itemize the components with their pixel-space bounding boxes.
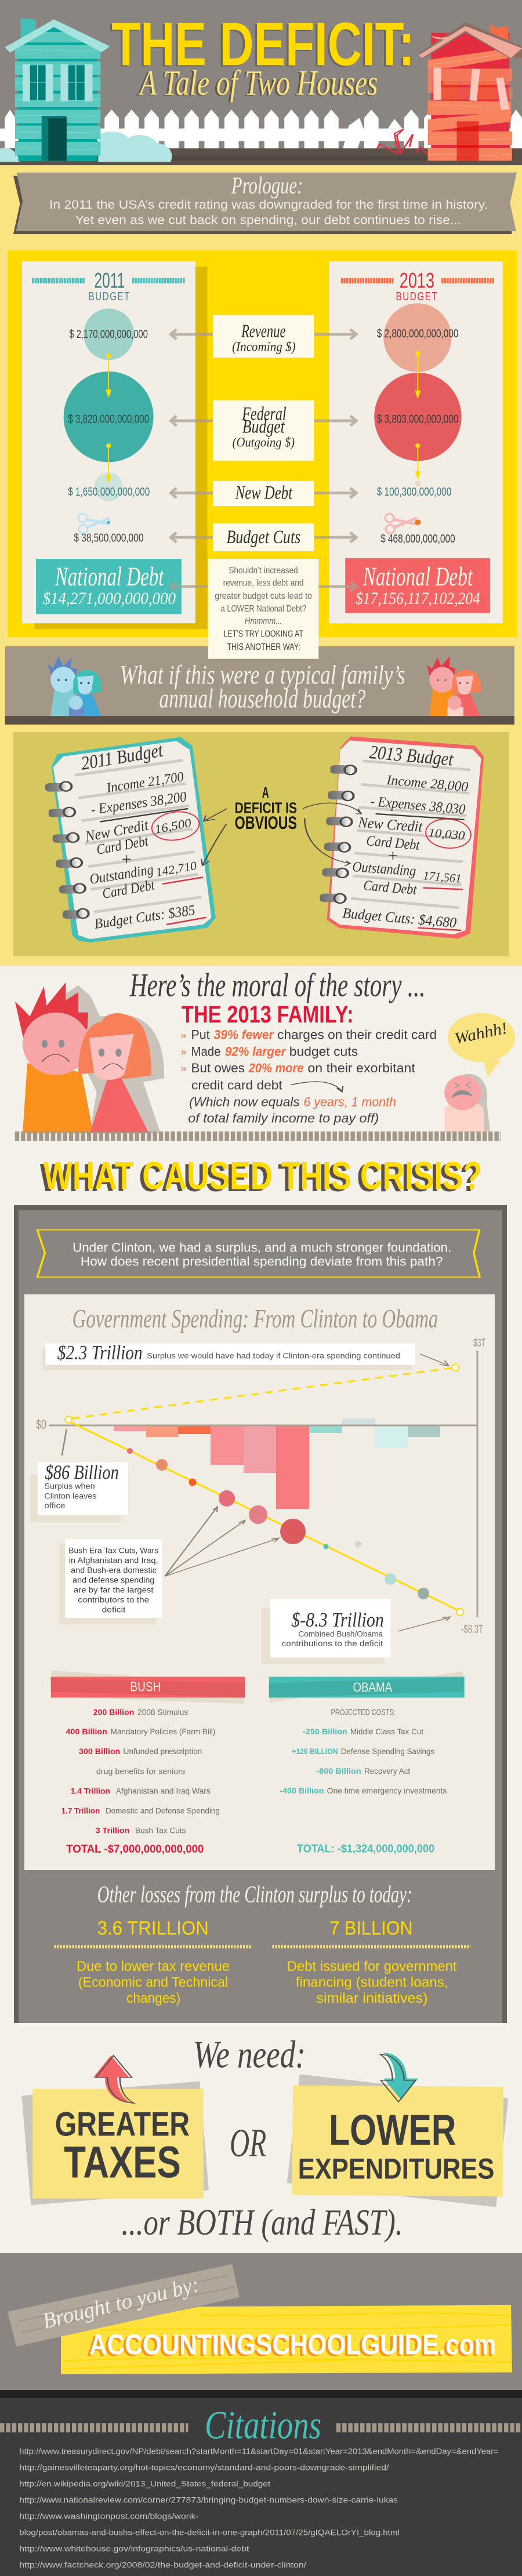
list: bush spending: Bush Tax Cuts (135, 1827, 186, 1835)
list: bush spending: 400 Billion (66, 1727, 107, 1737)
label: new debt: New Debt (235, 482, 293, 503)
arrow: down (380, 2053, 418, 2102)
page background: sponsor band (0, 2253, 522, 2390)
speech bubble (448, 1013, 515, 1077)
notebook: 2013 budget (320, 737, 483, 938)
notebook: 2013 budget: 2013 Budget (368, 742, 455, 770)
notebook: 2011 budget: 142,710 (155, 858, 198, 879)
callout: $86 billion (30, 1429, 128, 1522)
note: greater taxes: TAXES (64, 2137, 181, 2187)
note: greater taxes (21, 2082, 209, 2205)
notebook: 2013 budget: 10,030 (428, 825, 466, 843)
callout: question box: a LOWER National Debt? (221, 603, 306, 614)
callout: bush era contributors: are by far the largest (74, 1586, 154, 1595)
notebook: 2011 budget: Outstanding (89, 862, 155, 887)
stat: 3.6 trillion: 3.6 TRILLION (97, 1918, 209, 1939)
banner text: What if this were a typical family’s (120, 660, 405, 690)
chart axes (36, 1337, 485, 1636)
arrows: connecting labels to panels (171, 329, 356, 591)
icon: scissors 2013 (385, 514, 421, 533)
list: obama spending: Defense Spending Savings (341, 1747, 434, 1756)
list: obama spending: -800 Billion (316, 1767, 361, 1776)
label: federal budget: Federal (242, 403, 287, 424)
list: family facts: » (181, 1063, 186, 1074)
chart axes: $3T (473, 1337, 485, 1349)
callout: -$8.3 trillion: Combined Bush/Obama (298, 1629, 383, 1639)
2011 heading: BUDGET (89, 290, 130, 303)
bubble: revenue 2013: $ 2,800,000,000,000 (377, 328, 458, 340)
panel: 2011 budget (22, 261, 195, 623)
list: family facts: » (181, 1046, 186, 1057)
notebook: 2011 budget: Card Debt (95, 834, 150, 858)
2013 heading (341, 269, 494, 303)
callout: -$8.3 trillion: contributions to the deficit (282, 1639, 383, 1649)
callout: $2.3 trillion: $2.3 Trillion (57, 1341, 143, 1364)
list: obama spending: -250 Billion (303, 1727, 347, 1737)
panel shadow (34, 267, 208, 629)
header section (0, 10, 522, 234)
bush header (51, 1671, 245, 1704)
callout: a deficit is obvious: OBVIOUS (235, 813, 297, 833)
list: family facts: Made (191, 1044, 221, 1058)
list: bush spending: Domestic and Defense Spending (106, 1807, 220, 1815)
section: we need (21, 2033, 508, 2243)
callout: bush era contributors: and defense spending (72, 1576, 154, 1585)
national debt 2011 (36, 559, 182, 614)
label: federal budget (213, 400, 314, 461)
callout: question box: Hmmmm... (245, 616, 282, 626)
notebook: 2011 budget: - Expenses 38,200 (90, 789, 188, 818)
stat: 7 billion (273, 1918, 470, 2006)
other losses section (55, 1881, 470, 2006)
callout: bush era contributors: contributors to the (78, 1596, 149, 1604)
stat: 3.6 trillion (55, 1918, 252, 2006)
callout: -$8.3 trillion (262, 1599, 450, 1664)
list: bush spending: Mandatory Policies (Farm Bill) (111, 1727, 215, 1737)
label: budget cuts (213, 523, 314, 551)
label: revenue (213, 315, 314, 358)
list: obama spending (280, 1708, 447, 1855)
callout: $86 billion: $86 Billion (45, 1461, 119, 1483)
list: bush spending: 3 Trillion (96, 1827, 129, 1835)
stat: 7 billion: similar initiatives) (316, 1991, 428, 2006)
page background: citations band (0, 2390, 522, 2576)
2011 heading (32, 269, 185, 303)
bush header: BUSH (130, 1679, 161, 1694)
label: federal budget: Budget (242, 416, 285, 437)
notebook: 2013 budget: Outstanding (352, 859, 416, 879)
callout: a deficit is obvious: DEFICIT IS (235, 799, 297, 816)
section: the moral of the story (15, 967, 515, 1200)
bubble: spending 2013: $ 3,803,000,000,000 (377, 413, 458, 425)
list: bush spending: drug benefits for seniors (96, 1767, 185, 1776)
citations list: http://www.factcheck.org/2008/02/the-budget-and-deficit-under-clinton/ (19, 2560, 306, 2570)
label: revenue: (Incoming $) (232, 339, 296, 354)
panel: prologue banner: Prologue: (231, 172, 303, 199)
citations list: http://www.whitehouse.gov/infographics/us-national-debt (19, 2544, 249, 2553)
chart dots (127, 1448, 429, 1599)
icon: healthy teal house (5, 19, 110, 161)
citations heading: Citations (205, 2403, 321, 2447)
bubble: new debt 2011: $ 1,650,000,000,000 (68, 486, 150, 499)
label: revenue: Revenue (241, 321, 285, 341)
panel: household budget notebooks (13, 732, 509, 956)
wood plank: brought to you by: Brought to you by: (40, 2272, 201, 2334)
list: obama spending: +126 BILLION (292, 1747, 338, 1756)
citations list (19, 2447, 499, 2570)
chart axes: $0 (36, 1417, 46, 1432)
callout: $86 billion: Surplus when (44, 1482, 95, 1491)
notebook: 2011 budget: + (121, 850, 132, 869)
list: family facts: Put (191, 1028, 210, 1042)
callout: bush era contributors: in Afghanistan and Iraq, (69, 1556, 158, 1565)
callout: bush era contributors: Bush Era Tax Cuts, Wars (68, 1546, 158, 1555)
panel: government spending chart (24, 1294, 495, 1870)
bubble: new debt 2011 (68, 472, 150, 501)
national debt 2013 (345, 558, 490, 613)
line: actual deficit (65, 1416, 463, 1616)
bubble: spending 2011: $ 3,820,000,000,000 (68, 413, 149, 425)
notebook: 2013 budget: + (387, 846, 398, 865)
list: family facts: budget cuts (289, 1044, 358, 1058)
callout: bush era contributors: and Bush-era domestic (71, 1566, 157, 1575)
bubble: spending 2011 (64, 372, 154, 462)
page background: header sky (0, 0, 522, 165)
callout: $86 billion: Clinton leaves (44, 1491, 97, 1501)
callout: $2.3 trillion (42, 1341, 449, 1370)
list: family facts: 6 years, 1 month (303, 1094, 396, 1109)
notebook: 2011 budget: Budget Cuts: $385 (93, 903, 196, 932)
arrow: up (93, 2055, 134, 2103)
bar chart (114, 1418, 440, 1509)
panel: prologue banner (13, 172, 517, 234)
callout: question box: THIS ANOTHER WAY: (227, 641, 300, 652)
panel: 2013 budget (329, 261, 503, 623)
list: bush spending: Afghanistan and Iraq Wars (116, 1787, 211, 1796)
list: bush spending: 300 Billion (79, 1747, 120, 1756)
panel: crisis analysis (14, 1205, 507, 2023)
notebook: 2013 budget: Card Debt (365, 833, 420, 853)
panel: family banner (5, 646, 514, 725)
label: budget cuts: Budget Cuts (226, 526, 300, 548)
obama header (269, 1671, 465, 1703)
2013 heading: 2013 (400, 269, 434, 293)
icon: cracks in the ground (377, 129, 429, 157)
list: bush spending: 1.7 Trillion (61, 1807, 100, 1815)
arrows: deficit pointers (201, 803, 361, 866)
list: bush spending: 200 Billion (93, 1708, 134, 1717)
arrows: 2011 flow (106, 354, 111, 482)
section: citations (0, 2390, 522, 2570)
callout: bush era contributors: deficit (102, 1606, 126, 1614)
obama header: OBAMA (353, 1679, 392, 1694)
arrows: contributors (165, 1507, 279, 1576)
list: family facts: 20% more (248, 1061, 303, 1075)
callout: a deficit is obvious: A (262, 784, 269, 801)
banner text (120, 660, 405, 714)
callout: -$8.3 trillion: $-8.3 Trillion (291, 1609, 384, 1631)
prologue text (49, 198, 488, 227)
subtitle (136, 63, 378, 103)
label: federal budget: (Outgoing $) (233, 435, 295, 450)
list: obama spending: Middle Class Tax Cut (350, 1727, 423, 1737)
list: bush spending: 2008 Stimulus (137, 1708, 188, 1717)
wood plank: brought to you by (8, 2264, 240, 2346)
note: greater taxes: GREATER (55, 2105, 190, 2143)
banner text: annual household budget? (159, 683, 365, 714)
budget cuts 2013: $ 468,000,000,000 (380, 533, 455, 545)
notebook: 2013 budget: Budget Cuts: $4,680 (342, 905, 458, 931)
chart axes: -$8.3T (461, 1624, 483, 1636)
icon: 2013 family (427, 656, 481, 716)
list: family facts (181, 1028, 437, 1126)
bubble: new debt 2013 (377, 481, 451, 499)
list: family facts: credit card debt (191, 1078, 282, 1092)
citations list: http://en.wikipedia.org/wiki/2013_United_States_federal_budget (19, 2479, 270, 2488)
bubble: spending 2013 (374, 373, 462, 461)
budget cuts 2011: $ 38,500,000,000 (74, 532, 143, 544)
list: obama spending: -400 Billion (280, 1787, 324, 1796)
notebook: 2011 budget: 16,500 (153, 816, 193, 836)
notebook: 2013 budget: - Expenses 38,030 (369, 794, 466, 817)
list: family facts: But owes (191, 1061, 245, 1075)
line: clinton projection (72, 1364, 459, 1418)
list: family facts: 39% fewer (214, 1028, 274, 1042)
notebook: 2011 budget: 2011 Budget (79, 740, 165, 774)
yellow backdrop (8, 250, 517, 637)
speech bubble text: Wahhh! (453, 1019, 509, 1048)
callout: a deficit is obvious (201, 784, 361, 866)
arrow: debt curve (291, 1082, 343, 1091)
section: sponsor (8, 2264, 512, 2374)
ribbon: clinton intro (37, 1230, 480, 1277)
list: bush spending: TOTAL -$7,000,000,000,000 (66, 1842, 204, 1855)
notebook: 2011 budget (45, 738, 215, 942)
page background: cream band (0, 966, 522, 2253)
list: family facts: 92% larger (225, 1044, 287, 1058)
2011 heading: 2011 (94, 269, 125, 293)
list: family facts: of total family income to pay off) (188, 1111, 379, 1126)
national debt 2011: National Debt (55, 562, 164, 592)
label: new debt (213, 481, 314, 506)
icon: sad parents (15, 982, 164, 1133)
list: bush spending: Unfunded prescription (123, 1747, 202, 1756)
notebook: 2013 budget: Income 28,000 (385, 773, 469, 795)
national debt 2013: $17,156,117,102,204 (356, 588, 480, 608)
bushes (0, 132, 172, 162)
list: family facts: (Which now equals (189, 1094, 300, 1109)
list: obama spending: Recovery Act (364, 1767, 411, 1776)
stat: 3.6 trillion: (Economic and Technical (78, 1974, 228, 1990)
list: bush spending (61, 1708, 220, 1855)
callout: question box (208, 559, 318, 659)
icon: broken red house (419, 22, 522, 161)
stat: 3.6 trillion: Due to lower tax revenue (77, 1959, 230, 1974)
section: we need: OR (230, 2121, 266, 2165)
stat: 7 billion: 7 BILLION (329, 1918, 413, 1939)
callout: $86 billion: office (44, 1501, 66, 1511)
callout: question box: greater budget cuts lead to (215, 591, 312, 601)
citations list: http://www.washingtonpost.com/blogs/wonk- (19, 2512, 199, 2521)
notebook: 2013 budget: Card Debt (362, 878, 418, 898)
notebook: 2011 budget: Card Debt (101, 877, 157, 902)
yellow plank (61, 2305, 512, 2374)
callout: question box: Shouldn’t increased (229, 565, 298, 576)
list: family facts: on their exorbitant (307, 1061, 415, 1075)
notebook: 2013 budget: 171,561 (423, 868, 462, 886)
bubble: revenue 2013 (377, 303, 458, 372)
white picket fence (0, 110, 522, 148)
section: we need: We need: (193, 2033, 306, 2076)
callout: question box: revenue, less debt and (223, 577, 303, 588)
notebook: 2011 budget: New Credit (84, 816, 150, 845)
icon: crying baby (444, 1074, 490, 1132)
icon: 2011 family (48, 656, 102, 716)
stat: 3.6 trillion: changes) (126, 1991, 180, 2006)
list: bush spending: 1.4 Trillion (71, 1787, 110, 1796)
2013 heading: BUDGET (396, 290, 438, 303)
national debt 2011: $14,271,000,000,000 (42, 588, 176, 608)
list: obama spending: PROJECTED COSTS: (331, 1708, 396, 1717)
dashed divider (15, 1122, 501, 1150)
callout: question box: LET’S TRY LOOKING AT (224, 628, 303, 639)
bubble: revenue 2011 (69, 308, 148, 360)
bubble: revenue 2011: $ 2,170,000,000,000 (69, 328, 148, 341)
notebook: 2013 budget: New Credit (357, 814, 423, 835)
list: family facts: » (181, 1029, 186, 1040)
icon: scissors 2011 (78, 514, 110, 533)
callout: bush era contributors (59, 1507, 279, 1625)
notebook: 2011 budget: Income 21,700 (105, 769, 184, 796)
note: lower expenditures (287, 2074, 508, 2207)
section: budget comparison (5, 250, 517, 725)
page background: pale yellow band (0, 165, 522, 966)
bubble: new debt 2013: $ 100,300,000,000 (377, 486, 451, 499)
ground (0, 148, 522, 165)
arrows: 2013 flow (415, 352, 420, 478)
